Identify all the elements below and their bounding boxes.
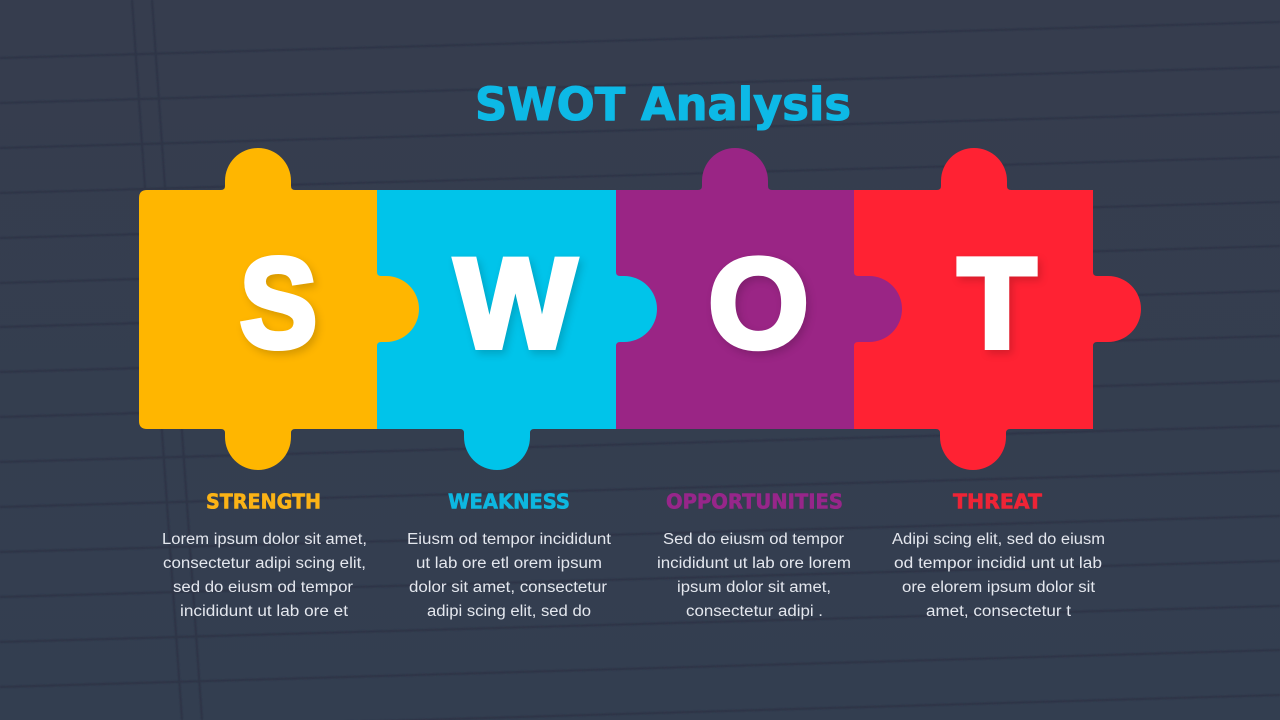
text: opportunities body: consectetur adipi . <box>686 603 823 620</box>
text: strength body: consectetur adipi scing elit, <box>163 555 366 572</box>
letter S: S <box>240 232 317 374</box>
text: threat body: ore elorem ipsum dolor sit <box>902 579 1096 596</box>
text: strength body: incididunt ut lab ore et <box>180 603 349 620</box>
text: threat body <box>892 531 1105 620</box>
letter W: W <box>455 232 576 374</box>
text: weakness body: adipi scing elit, sed do <box>427 603 591 620</box>
piece: opportunities (purple) <box>616 148 902 429</box>
text: weakness body: ut lab ore etl orem ipsum <box>416 555 602 572</box>
text: weakness body: Eiusm od tempor incididunt <box>407 531 612 548</box>
heading: strength: STRENGTH <box>206 490 321 514</box>
text: opportunities body: Sed do eiusm od tempor <box>663 531 844 548</box>
piece: weakness (cyan) <box>377 190 657 470</box>
column: opportunities <box>657 490 851 620</box>
puzzle: SWOT pieces <box>139 148 1141 470</box>
letter O: O <box>708 232 808 374</box>
heading: opportunities: OPPORTUNITIES <box>666 490 843 514</box>
letter T: T <box>958 232 1036 374</box>
text: opportunities body: incididunt ut lab ore lorem <box>657 555 851 572</box>
piece: strength (yellow) <box>139 148 419 470</box>
piece: threat (red) <box>854 148 1141 470</box>
text: opportunities body <box>657 531 851 620</box>
text: weakness body <box>407 531 612 620</box>
text: threat body: amet, consectetur t <box>926 603 1072 620</box>
text: threat body: Adipi scing elit, sed do eiusm <box>892 531 1105 548</box>
column: strength <box>162 490 367 620</box>
column: weakness <box>407 490 612 620</box>
text: threat body: od tempor incidid unt ut lab <box>894 555 1102 572</box>
title: SWOT Analysis <box>475 78 851 131</box>
text: strength body: sed do eiusm od tempor <box>173 579 353 596</box>
text: weakness body: dolor sit amet, consectetur <box>409 579 607 596</box>
heading: threat: THREAT <box>953 490 1042 514</box>
heading: weakness: WEAKNESS <box>448 490 570 514</box>
text: opportunities body: ipsum dolor sit amet, <box>677 579 831 596</box>
text: strength body <box>162 531 367 620</box>
text: strength body: Lorem ipsum dolor sit amet, <box>162 531 367 548</box>
column: threat <box>892 490 1105 620</box>
